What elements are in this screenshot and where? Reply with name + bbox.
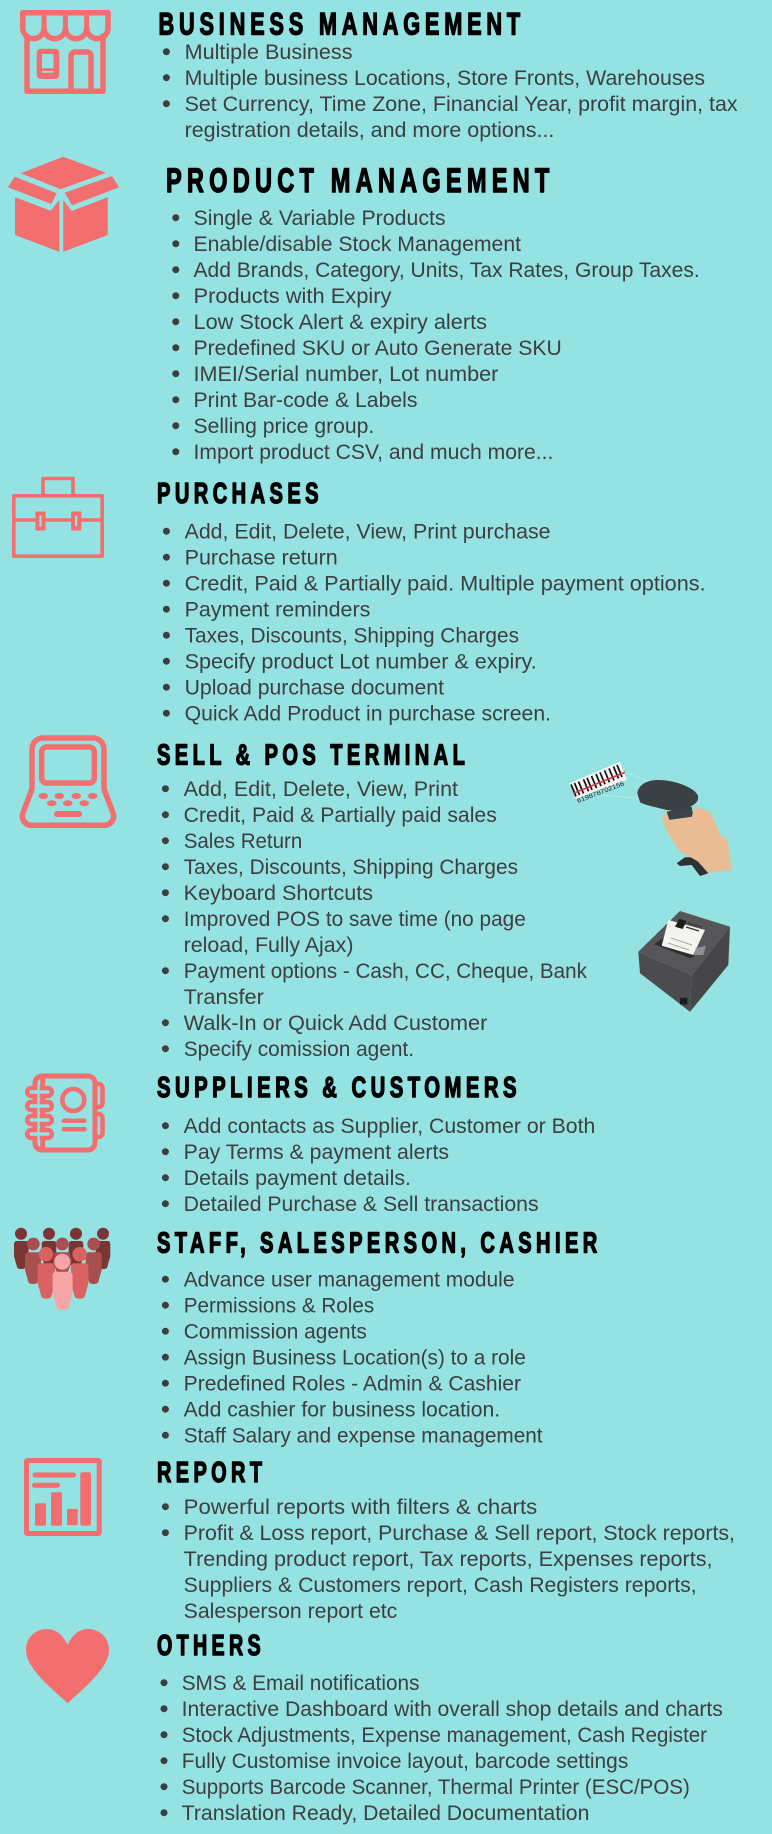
icon: heart xyxy=(26,1629,109,1703)
section: suppliers and customers xyxy=(27,1072,595,1216)
list: suppliers and customers: Pay Terms & payment alerts xyxy=(184,1141,449,1164)
list: product management: Products with Expiry xyxy=(194,285,392,308)
list: product management: Predefined SKU or Auto Generate SKU xyxy=(194,337,562,360)
section: purchases xyxy=(14,478,706,726)
section: business management xyxy=(23,6,738,142)
list: staff, salesperson, cashier: Permissions & Roles xyxy=(184,1294,374,1318)
list: purchases: Quick Add Product in purchase screen. xyxy=(185,702,551,726)
list: report: Powerful reports with filters & charts xyxy=(184,1496,537,1519)
list: product management: Single & Variable Products xyxy=(194,207,446,230)
heading: product management: PRODUCT MANAGEMENT xyxy=(166,162,554,200)
list: business management: Set Currency, Time Zone, Financial Year, profit margin, tax xyxy=(185,93,738,116)
list: business management xyxy=(163,41,738,142)
list: purchases: Payment reminders xyxy=(185,598,370,622)
list: staff, salesperson, cashier: Predefined Roles - Admin & Cashier xyxy=(184,1372,521,1396)
list: product management: Add Brands, Category, Units, Tax Rates, Group Taxes. xyxy=(194,259,700,282)
list: sell and pos terminal: Taxes, Discounts, Shipping Charges xyxy=(184,856,518,879)
list: report: Suppliers & Customers report, Cash Registers reports, xyxy=(184,1574,697,1597)
list: others: Supports Barcode Scanner, Thermal Printer (ESC/POS) xyxy=(182,1776,690,1799)
section: report xyxy=(26,1457,735,1623)
list: report: Profit & Loss report, Purchase & Sell report, Stock reports, xyxy=(184,1522,735,1545)
icon: pos terminal xyxy=(22,738,114,825)
list: purchases xyxy=(163,520,706,726)
list: product management: Print Bar-code & Labels xyxy=(194,389,418,412)
list: purchases: Upload purchase document xyxy=(185,676,444,700)
list: others: SMS & Email notifications xyxy=(182,1672,420,1695)
list: staff, salesperson, cashier xyxy=(162,1268,543,1448)
section: sell and pos terminal xyxy=(22,738,732,1061)
list: sell and pos terminal: Credit, Paid & Partially paid sales xyxy=(184,804,497,827)
icon: open box xyxy=(8,157,119,252)
list: suppliers and customers: Add contacts as Supplier, Customer or Both xyxy=(184,1115,595,1138)
list: sell and pos terminal xyxy=(162,778,587,1061)
list: report xyxy=(162,1496,735,1623)
list: business management: Multiple business Locations, Store Fronts, Warehouses xyxy=(185,67,705,90)
list: sell and pos terminal: Keyboard Shortcuts xyxy=(184,882,373,905)
list: business management: registration details, and more options... xyxy=(185,119,554,142)
list: others: Translation Ready, Detailed Documentation xyxy=(182,1802,589,1825)
list: staff, salesperson, cashier: Add cashier for business location. xyxy=(184,1398,500,1422)
list: report: Salesperson report etc xyxy=(184,1600,397,1623)
list: purchases: Taxes, Discounts, Shipping Charges xyxy=(185,624,519,648)
list: product management: Enable/disable Stock Management xyxy=(194,233,521,256)
icon: report chart xyxy=(26,1460,99,1534)
list: sell and pos terminal: Walk-In or Quick Add Customer xyxy=(184,1012,487,1035)
list: staff, salesperson, cashier: Staff Salary and expense management xyxy=(184,1424,543,1448)
list: others: Stock Adjustments, Expense management, Cash Register xyxy=(182,1724,707,1747)
section: staff, salesperson, cashier xyxy=(14,1227,602,1448)
icon: storefront xyxy=(23,13,108,91)
list: suppliers and customers: Detailed Purchase & Sell transactions xyxy=(184,1193,539,1216)
list: sell and pos terminal: Specify comission agent. xyxy=(184,1038,414,1061)
list: purchases: Credit, Paid & Partially paid. Multiple payment options. xyxy=(185,572,706,596)
icon: briefcase xyxy=(14,478,102,556)
illustration: thermal receipt printer xyxy=(638,911,730,1012)
list: others: Fully Customise invoice layout, barcode settings xyxy=(182,1750,628,1773)
list: suppliers and customers: Details payment details. xyxy=(184,1167,411,1190)
heading: sell and pos terminal: SELL & POS TERMINAL xyxy=(157,739,469,771)
list: sell and pos terminal: Improved POS to save time (no page xyxy=(184,908,526,931)
list: report: Trending product report, Tax reports, Expenses reports, xyxy=(184,1548,712,1571)
list: product management: Low Stock Alert & expiry alerts xyxy=(194,311,487,334)
illustration: barcode scanner in hand xyxy=(569,762,732,876)
icon: group of people xyxy=(14,1228,110,1310)
list: sell and pos terminal: Transfer xyxy=(184,986,264,1009)
list: purchases: Purchase return xyxy=(185,546,338,570)
list: staff, salesperson, cashier: Assign Business Location(s) to a role xyxy=(184,1346,526,1370)
list: sell and pos terminal: Sales Return xyxy=(184,830,302,853)
section: others xyxy=(26,1629,723,1825)
list: staff, salesperson, cashier: Advance user management module xyxy=(184,1268,514,1292)
heading: others: OTHERS xyxy=(157,1630,265,1662)
heading: business management: BUSINESS MANAGEMENT xyxy=(158,6,525,41)
section: product management xyxy=(8,157,700,464)
icon: address book xyxy=(27,1076,103,1150)
heading: purchases: PURCHASES xyxy=(157,478,323,510)
heading: report: REPORT xyxy=(157,1457,266,1489)
list: sell and pos terminal: reload, Fully Ajax) xyxy=(184,934,354,957)
list: product management: Selling price group. xyxy=(194,415,374,438)
list: others xyxy=(160,1672,723,1825)
list: sell and pos terminal: Add, Edit, Delete, View, Print xyxy=(184,778,458,801)
list: sell and pos terminal: Payment options - Cash, CC, Cheque, Bank xyxy=(184,960,587,983)
list: purchases: Specify product Lot number & expiry. xyxy=(185,650,537,674)
list: staff, salesperson, cashier: Commission agents xyxy=(184,1320,367,1344)
list: product management xyxy=(172,207,700,464)
list: product management: Import product CSV, and much more... xyxy=(194,441,553,464)
heading: suppliers and customers: SUPPLIERS & CUSTOMERS xyxy=(157,1072,521,1104)
list: purchases: Add, Edit, Delete, View, Print purchase xyxy=(185,520,550,544)
illustration: barcode scanner in hand: 619878702156 xyxy=(576,780,626,805)
heading: staff, salesperson, cashier: STAFF, SALESPERSON, CASHIER xyxy=(157,1227,602,1259)
list: others: Interactive Dashboard with overall shop details and charts xyxy=(182,1698,723,1721)
list: business management: Multiple Business xyxy=(185,41,352,64)
list: suppliers and customers xyxy=(162,1115,595,1216)
list: product management: IMEI/Serial number, Lot number xyxy=(194,363,498,386)
